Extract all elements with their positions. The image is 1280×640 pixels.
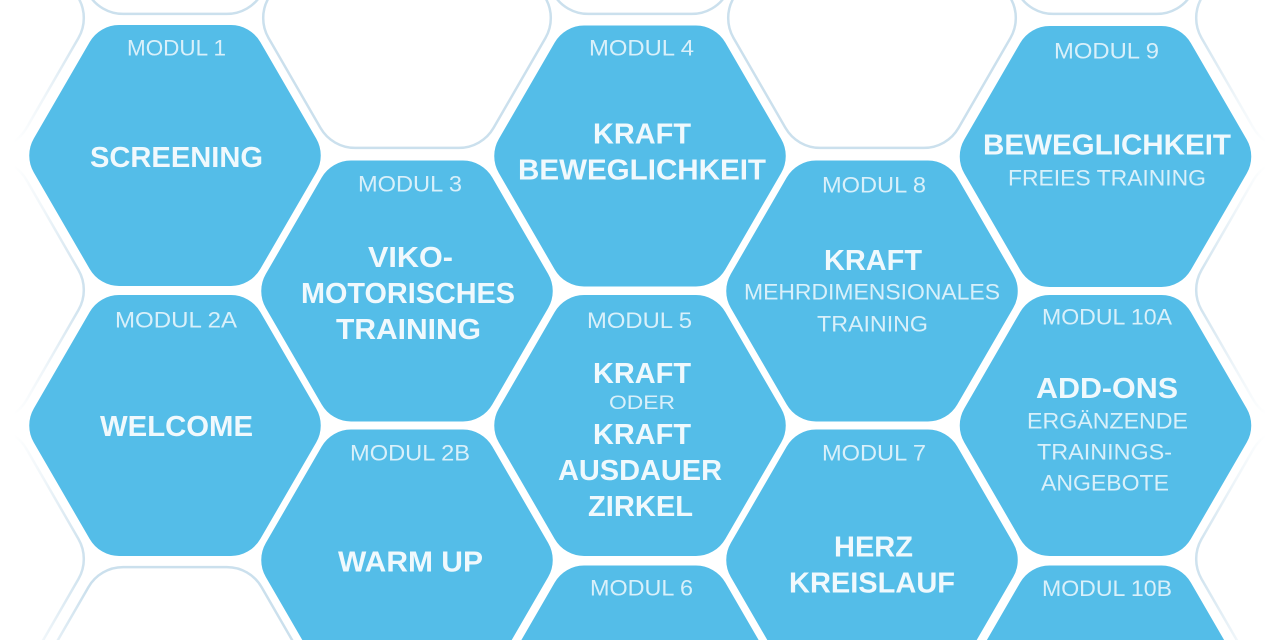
title: Herz Kreislauf: HERZ: [834, 532, 913, 564]
title: Viko-motorisches Training: MOTORISCHES: [301, 278, 515, 310]
title: Viko-motorisches Training: VIKO-: [368, 242, 453, 274]
subtitle: Ergänzende Trainingsangebote: ANGEBOTE: [1041, 470, 1169, 496]
subtitle: Ergänzende Trainingsangebote: [1027, 408, 1188, 496]
panel: Modul 6: [494, 566, 786, 640]
subtitle: Freies Training: FREIES TRAINING: [1008, 166, 1206, 190]
label: Modul 3: MODUL 3: [358, 172, 462, 196]
title: Kraft oder Kraft Ausdauer Zirkel: ODER: [609, 393, 675, 414]
label: Modul 7: MODUL 7: [822, 440, 926, 466]
title: Herz Kreislauf: KREISLAUF: [789, 568, 955, 600]
title: Kraft Beweglichkeit: BEWEGLICHKEIT: [518, 154, 766, 186]
label: Modul 8: MODUL 8: [822, 172, 926, 198]
label: Modul 2A: MODUL 2A: [115, 308, 237, 332]
subtitle: Ergänzende Trainingsangebote: TRAININGS-: [1037, 440, 1172, 464]
label: Modul 1: MODUL 1: [127, 36, 226, 60]
subtitle: Ergänzende Trainingsangebote: ERGÄNZENDE: [1027, 408, 1188, 434]
label: Modul 5: MODUL 5: [587, 308, 692, 333]
panel: Modul 8: [726, 160, 1018, 422]
title: Screening: SCREENING: [90, 142, 263, 174]
title: Beweglichkeit: BEWEGLICHKEIT: [983, 130, 1231, 162]
subtitle: Mehrdimensionales Training: [744, 280, 1000, 336]
panel: Modul 1: [29, 25, 321, 286]
title: Kraft oder Kraft Ausdauer Zirkel: KRAFT: [593, 358, 691, 390]
title: Kraft oder Kraft Ausdauer Zirkel: AUSDAUER: [558, 455, 722, 487]
panel: Modul 4: [494, 26, 786, 286]
panel: Modul 2B: [261, 430, 553, 640]
panel: Modul 10A: [960, 295, 1251, 556]
panel: Modul 9: [960, 26, 1251, 287]
title: Kraft Beweglichkeit: KRAFT: [593, 118, 691, 150]
title: Add-ons: ADD-ONS: [1036, 373, 1178, 405]
panel: Modul 3: [261, 160, 553, 422]
panel: Modul 5: [494, 295, 786, 556]
label: Modul 9: MODUL 9: [1054, 38, 1159, 64]
title: Kraft oder Kraft Ausdauer Zirkel: ZIRKEL: [588, 491, 693, 523]
title: Welcome: WELCOME: [100, 411, 253, 443]
label: Modul 2B: MODUL 2B: [350, 440, 470, 466]
title: Kraft oder Kraft Ausdauer Zirkel: [558, 358, 722, 523]
title: Viko-motorisches Training: TRAINING: [336, 314, 481, 346]
subtitle: Mehrdimensionales Training: TRAINING: [817, 312, 928, 336]
panel: Modul 7: [726, 430, 1018, 640]
title: Kraft Beweglichkeit: [518, 118, 766, 186]
label: Modul 6: MODUL 6: [590, 576, 693, 600]
title: Herz Kreislauf: [789, 532, 955, 600]
label: Modul 10B: MODUL 10B: [1042, 576, 1172, 601]
label: Modul 10A: MODUL 10A: [1042, 304, 1172, 330]
title: Warm up: WARM UP: [338, 546, 483, 578]
label: Modul 4: MODUL 4: [589, 36, 694, 60]
title: Kraft oder Kraft Ausdauer Zirkel: KRAFT: [593, 419, 691, 451]
panel: Modul 2A: [29, 295, 321, 556]
title: Viko-motorisches Training: [301, 242, 515, 346]
panel: Modul 10B: [960, 566, 1251, 640]
title: Kraft: KRAFT: [824, 245, 922, 277]
subtitle: Mehrdimensionales Training: MEHRDIMENSIONALES: [744, 280, 1000, 304]
